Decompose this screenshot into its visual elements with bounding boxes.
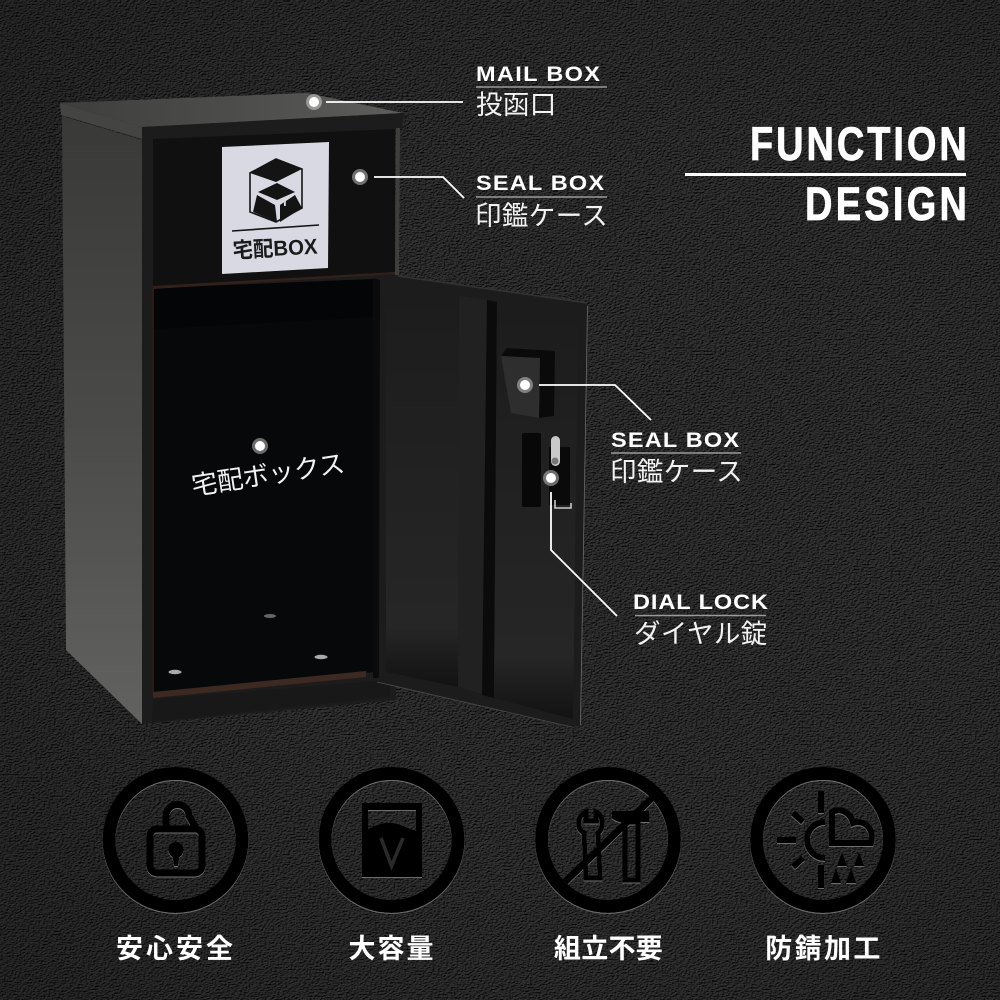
callout: dial lock: ダイヤル錠 bbox=[634, 619, 768, 649]
callout: mail box bbox=[306, 62, 607, 120]
icon: padlock bbox=[109, 774, 242, 906]
door bbox=[373, 275, 588, 727]
feature: large capacity bbox=[325, 774, 458, 964]
callout: mail box: 投函口 bbox=[476, 90, 557, 120]
label: 防錆加工 bbox=[765, 934, 883, 964]
callout: seal box on door: SEAL BOX bbox=[611, 428, 739, 452]
callout: seal box upper: 印鑑ケース bbox=[475, 201, 608, 231]
side panel bbox=[62, 116, 142, 724]
sill bbox=[152, 680, 390, 722]
interior shelf shadow bbox=[154, 317, 373, 692]
roof bbox=[60, 93, 403, 127]
feature: rust proofing bbox=[756, 774, 890, 964]
label: 大容量 bbox=[348, 934, 436, 964]
callout: mail box: MAIL BOX bbox=[476, 62, 600, 86]
hinge side dark strip bbox=[373, 278, 380, 678]
callout: parcel box interior: 宅配ボックス bbox=[189, 448, 347, 501]
front upper panel bbox=[142, 113, 404, 724]
door channel bbox=[482, 300, 497, 698]
door frame bbox=[373, 275, 588, 727]
callout: seal box upper: SEAL BOX bbox=[476, 171, 604, 195]
callout: dial lock: DIAL LOCK bbox=[633, 590, 768, 614]
icon: sun and rain cloud bbox=[756, 774, 890, 906]
label: 安心安全 bbox=[116, 934, 236, 964]
seal box on door bbox=[501, 348, 555, 418]
plate text: 宅配BOX bbox=[232, 235, 319, 263]
door right panel bbox=[494, 302, 578, 719]
icon: tablet with V bbox=[325, 774, 458, 906]
cube icon bbox=[250, 159, 302, 222]
door middle strip bbox=[458, 296, 487, 694]
roof left lip bbox=[60, 103, 142, 139]
title: function design: FUNCTION bbox=[750, 118, 967, 171]
interior bbox=[154, 279, 373, 692]
icon: crossed out tools bbox=[542, 774, 674, 906]
floor holes bbox=[168, 614, 328, 674]
door bottom highlight bbox=[377, 682, 572, 727]
right edge strip bbox=[395, 128, 400, 276]
callout: seal box on door: 印鑑ケース bbox=[610, 457, 743, 487]
callout: dial lock bbox=[543, 470, 768, 649]
label: 組立不要 bbox=[554, 934, 663, 964]
header face bbox=[153, 129, 395, 287]
callout: seal box on door bbox=[517, 377, 743, 487]
callout: seal box upper bbox=[352, 169, 608, 231]
lower wood edge bbox=[153, 671, 366, 698]
title: function design bbox=[685, 118, 967, 231]
feature: no assembly bbox=[542, 774, 674, 964]
door right edge highlight bbox=[580, 306, 588, 725]
title: function design: DESIGN bbox=[805, 178, 967, 231]
left wood edge bbox=[152, 289, 154, 694]
dial lock bbox=[522, 433, 571, 508]
sign: parcel box logo plate bbox=[222, 142, 329, 274]
plate rule bbox=[232, 225, 319, 231]
feature: safety lock bbox=[109, 774, 242, 964]
door left panel bbox=[386, 286, 459, 687]
upper wood edge bbox=[153, 272, 395, 289]
door top highlight bbox=[398, 276, 587, 303]
product: parcel box body bbox=[60, 93, 404, 724]
